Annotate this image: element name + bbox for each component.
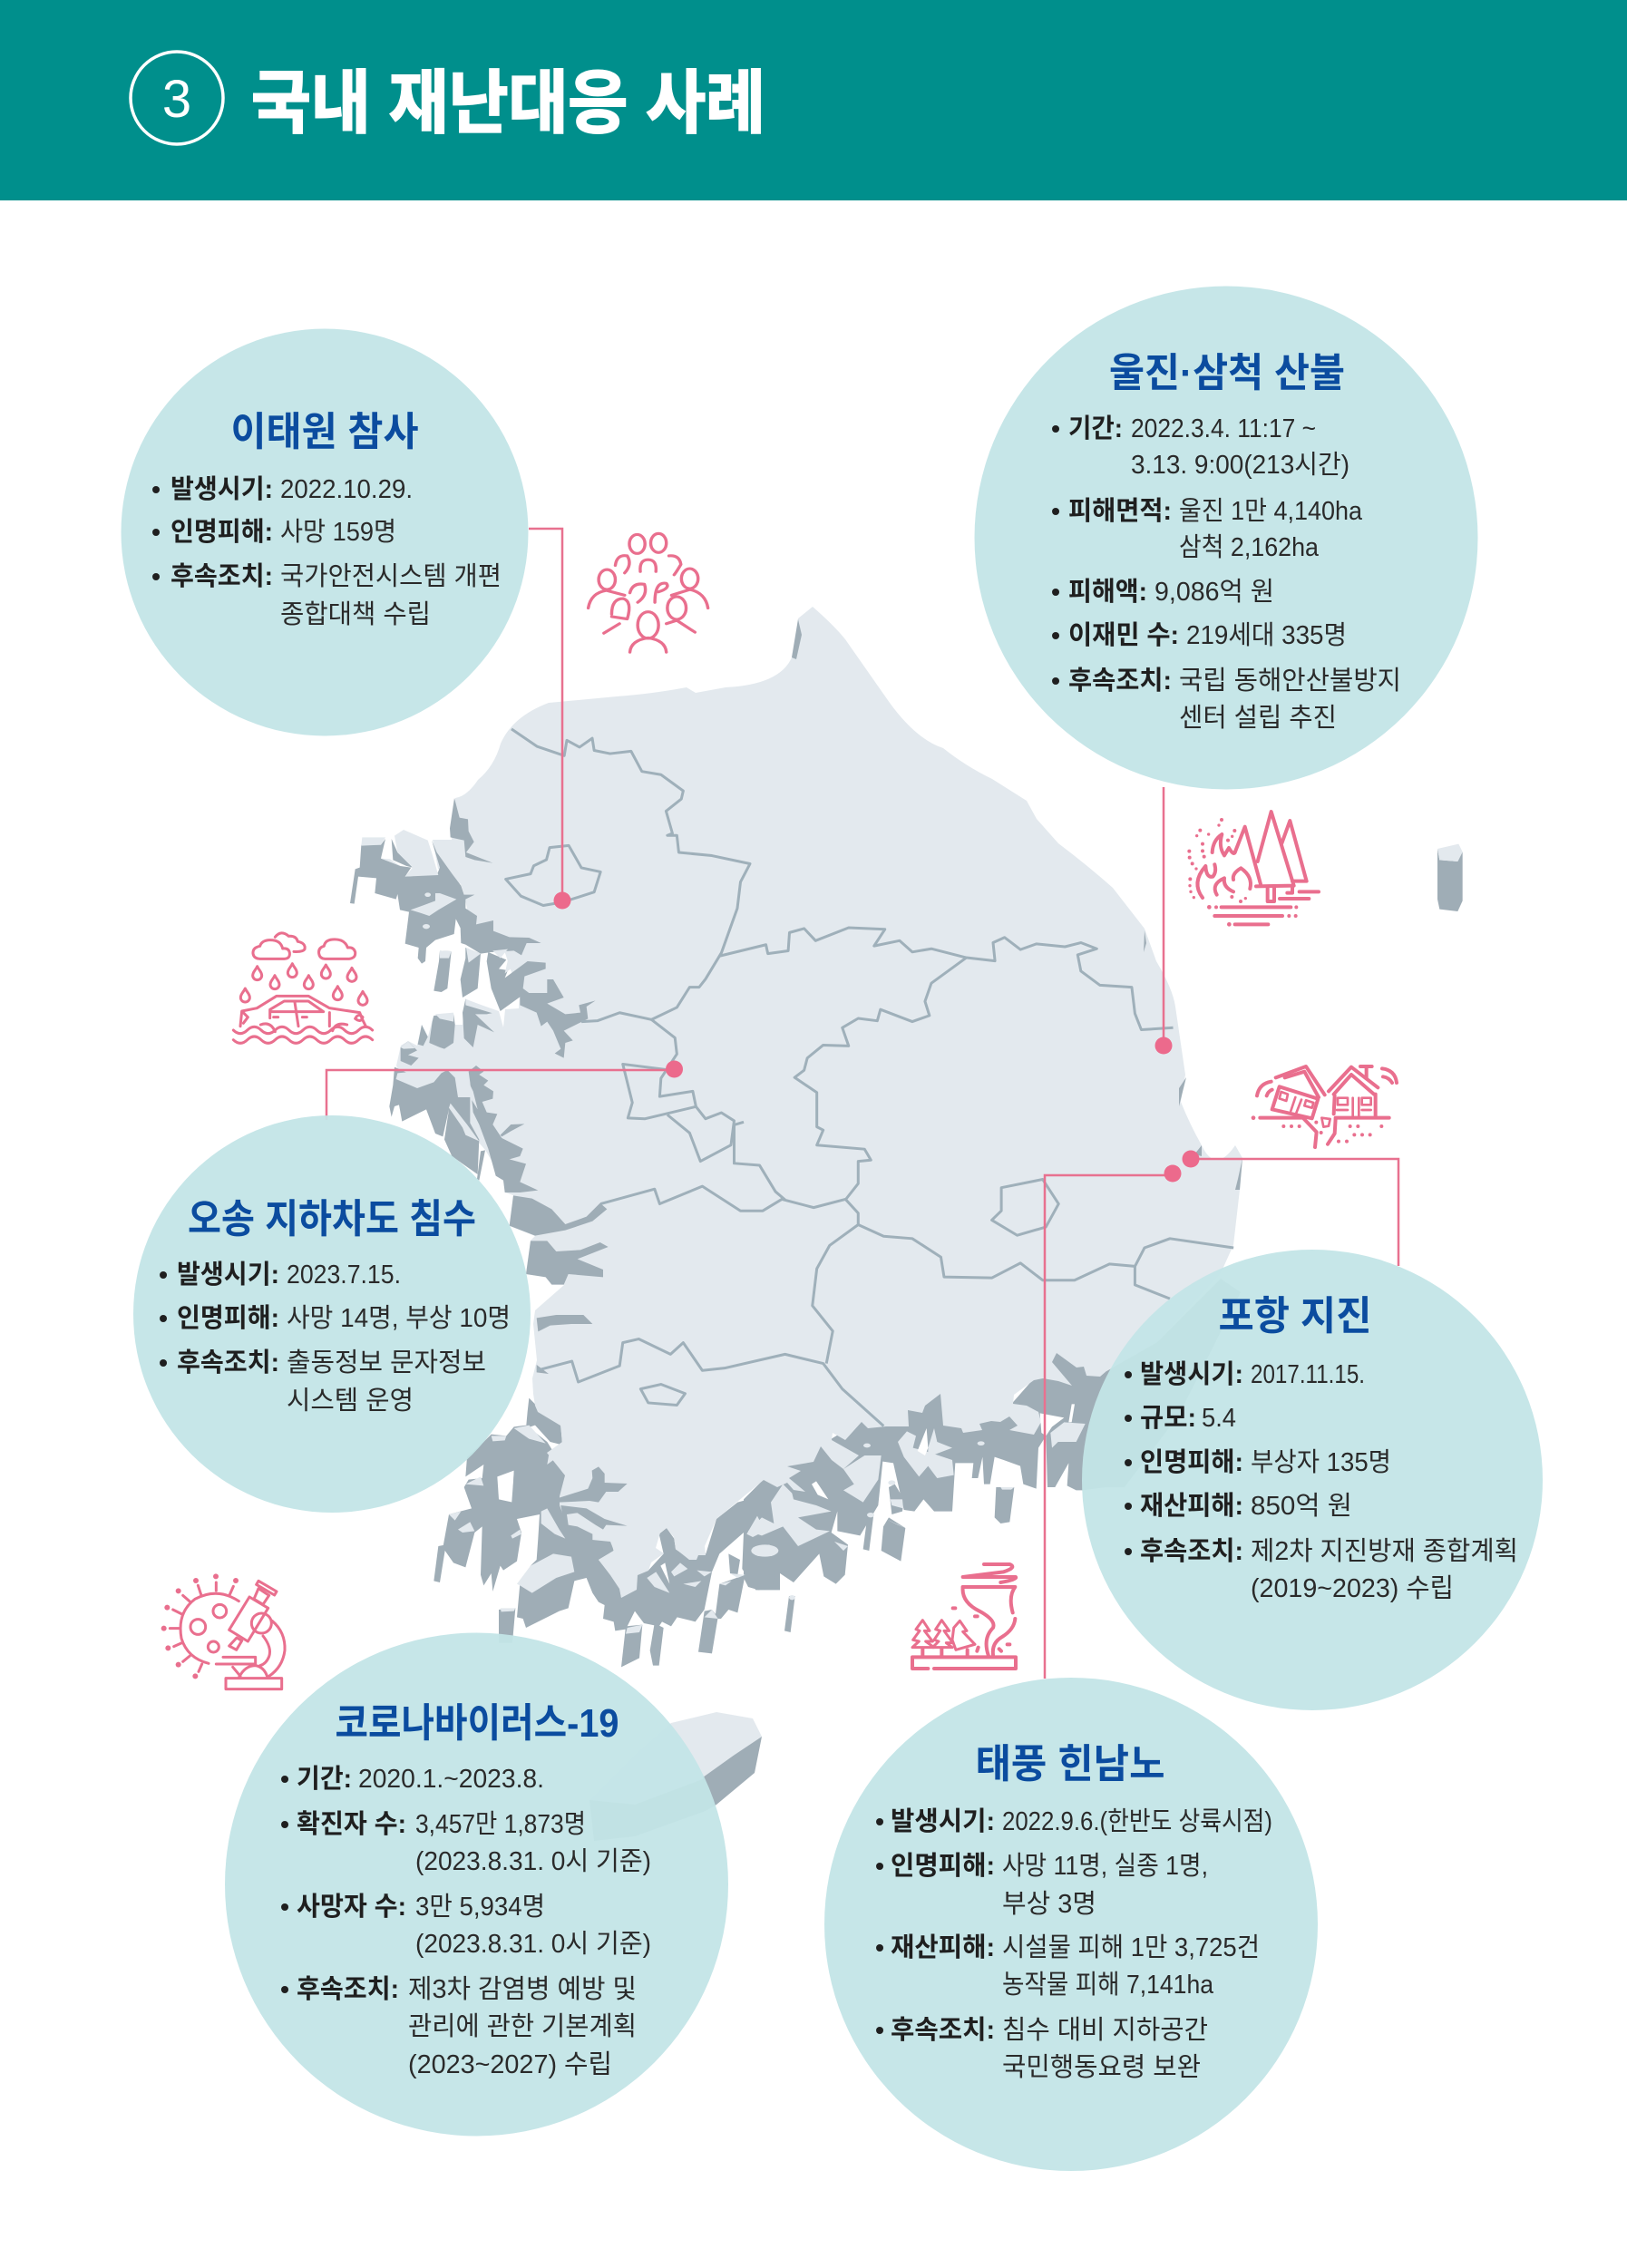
details: Osong: [159, 1260, 511, 1416]
details: Typhoon: 농작물 피해 7,141ha: [1002, 1971, 1214, 2000]
details: Pohang: 재산피해:: [1140, 1491, 1243, 1521]
details: Pohang: 2017.11.15.: [1251, 1360, 1365, 1389]
land mass: [396, 607, 1242, 1598]
details: Typhoon: 침수 대비 지하공간: [1002, 2015, 1208, 2045]
details: wildfire: 9,086억 원: [1154, 578, 1274, 607]
icon: forest fire: [1187, 812, 1319, 927]
details: Osong: •: [159, 1261, 168, 1289]
location pins: [553, 892, 1199, 1183]
details: Itaewon: [151, 474, 502, 629]
icon: earthquake damaged houses: [1252, 1066, 1397, 1147]
south coast shadow, western section: [434, 1398, 780, 1667]
panel: Typhoon Hinnamnor: [824, 1678, 1318, 2171]
heading: Osong: 오송 지하차도 침수: [188, 1197, 476, 1241]
icon: typhoon tornado with trees: [912, 1564, 1016, 1669]
details: wildfire: 3.13. 9:00(213시간): [1131, 451, 1349, 480]
mid-west coast shadows: [389, 1066, 609, 1331]
Ulleungdo island: [1437, 844, 1463, 911]
details: Pohang: •: [1124, 1448, 1133, 1476]
details: Typhoon: 재산피해:: [891, 1932, 995, 1962]
details: wildfire: •: [1051, 667, 1060, 695]
icon: virus and microscope: [161, 1573, 285, 1689]
details: Pohang: (2019~2023) 수립: [1251, 1573, 1454, 1603]
details: Typhoon: 부상 3명: [1002, 1890, 1096, 1919]
connector lines: [326, 529, 1398, 1679]
details: Itaewon: 국가안전시스템 개편: [280, 561, 502, 591]
details: Osong: 사망 14명, 부상 10명: [287, 1304, 511, 1333]
details: wildfire: •: [1051, 621, 1060, 649]
header band: [0, 0, 1627, 200]
heading: COVID-19: 코로나바이러스-19: [336, 1701, 619, 1746]
heading: Pohang: 포항 지진: [1219, 1294, 1371, 1338]
details: Osong: 2023.7.15.: [287, 1261, 401, 1290]
details: Typhoon: •: [875, 1807, 884, 1835]
map of South Korea: [350, 607, 1463, 1841]
details: Typhoon: 사망 11명, 실종 1명,: [1002, 1852, 1208, 1881]
details: wildfire: 2022.3.4. 11:17 ~: [1131, 414, 1316, 443]
icon: flooded car in rain: [233, 933, 373, 1043]
details: Typhoon: •: [875, 1852, 884, 1880]
details: Typhoon: 국민행동요령 보완: [1002, 2052, 1201, 2082]
details: Osong: •: [159, 1348, 168, 1377]
details: COVID-19: •: [280, 1765, 289, 1793]
details: Pohang: •: [1124, 1404, 1133, 1432]
details: Pohang: 850억 원: [1251, 1492, 1352, 1521]
details: Pohang: 5.4: [1202, 1404, 1236, 1433]
details: wildfire: 후속조치:: [1068, 666, 1172, 696]
details: Pohang: 발생시기:: [1140, 1359, 1243, 1389]
details: wildfire: [1051, 414, 1401, 733]
details: Typhoon: •: [875, 1933, 884, 1961]
details: Pohang: •: [1124, 1537, 1133, 1565]
details: wildfire: 이재민 수:: [1068, 620, 1179, 650]
south-west pole island: [511, 1469, 520, 1505]
details: COVID-19: 제3차 감염병 예방 및: [408, 1975, 637, 2004]
details: Typhoon: 발생시기:: [891, 1806, 995, 1836]
details: COVID-19: (2023~2027) 수립: [408, 2049, 612, 2079]
north-west coast and island shadows: [350, 798, 596, 1066]
details: Osong: 시스템 운영: [287, 1387, 414, 1416]
details: Osong: 후속조치:: [177, 1348, 279, 1377]
details: Typhoon: 2022.9.6.(한반도 상륙시점): [1002, 1807, 1272, 1836]
details: COVID-19: •: [280, 1893, 289, 1921]
details: COVID-19: [280, 1764, 651, 2079]
panel: Itaewon disaster: [122, 328, 528, 736]
details: Itaewon: 2022.10.29.: [280, 475, 413, 504]
details: Pohang: [1124, 1359, 1518, 1603]
details: wildfire: •: [1051, 414, 1060, 443]
south-west inlets: [537, 1365, 628, 1540]
details: Pohang: 제2차 지진방재 종합계획: [1251, 1536, 1518, 1566]
details: Pohang: 부상자 135명: [1251, 1448, 1391, 1477]
heading: wildfire: 울진·삼척 산불: [1109, 351, 1345, 395]
title: 국내 재난대응 사례: [251, 65, 765, 142]
details: COVID-19: 2020.1.~2023.8.: [358, 1765, 544, 1794]
details: Osong: 발생시기:: [177, 1260, 279, 1290]
details: wildfire: 기간:: [1068, 414, 1123, 443]
section number badge: 3: [162, 70, 191, 129]
details: Itaewon: •: [151, 562, 161, 590]
details: Typhoon: •: [875, 2016, 884, 2044]
section number badge: [131, 52, 223, 144]
details: Itaewon: •: [151, 475, 161, 503]
details: COVID-19: •: [280, 1810, 289, 1838]
panel: Pohang earthquake: [1082, 1250, 1543, 1710]
icon: crowd of people: [589, 533, 708, 652]
sea gaps south-west: [497, 1471, 669, 1584]
details: wildfire: 센터 설립 추진: [1179, 703, 1337, 733]
details: COVID-19: (2023.8.31. 0시 기준): [415, 1930, 651, 1959]
light island tops south-east: [748, 1422, 1086, 1600]
details: COVID-19: 후속조치:: [297, 1974, 399, 2004]
light island tops south-west: [449, 1426, 771, 1634]
light island tops north-west: [361, 830, 524, 1049]
details: Pohang: •: [1124, 1492, 1133, 1520]
details: Typhoon: 시설물 피해 1만 3,725건: [1002, 1933, 1260, 1962]
south-east coast shadow beneath Pohang panel: [1102, 1279, 1241, 1487]
sea gaps south-east: [812, 1404, 1075, 1499]
details: wildfire: 219세대 335명: [1186, 620, 1347, 650]
Jeju island: [589, 1712, 762, 1841]
details: Itaewon: •: [151, 518, 161, 546]
details: COVID-19: 관리에 관한 기본계획: [408, 2011, 637, 2041]
details: Osong: 인명피해:: [177, 1303, 279, 1333]
details: Typhoon: [875, 1806, 1272, 2082]
details: Pohang: 규모:: [1140, 1404, 1196, 1433]
details: Typhoon: 인명피해:: [891, 1851, 995, 1881]
details: wildfire: 삼척 2,162ha: [1179, 532, 1320, 562]
details: COVID-19: 3,457만 1,873명: [415, 1810, 586, 1839]
details: COVID-19: (2023.8.31. 0시 기준): [415, 1847, 651, 1876]
panel: COVID-19: [225, 1632, 728, 2137]
details: Itaewon: 종합대책 수립: [280, 599, 431, 629]
details: Pohang: 후속조치:: [1140, 1536, 1243, 1566]
details: Osong: 출동정보 문자정보: [287, 1348, 486, 1377]
details: Itaewon: 사망 159명: [280, 518, 396, 547]
details: Itaewon: 후속조치:: [170, 561, 273, 591]
provincial borders south: [537, 1180, 1233, 1426]
details: COVID-19: 사망자 수:: [297, 1892, 406, 1922]
details: COVID-19: 기간:: [297, 1764, 352, 1794]
light island tops mid-west: [396, 1072, 479, 1141]
details: wildfire: •: [1051, 497, 1060, 525]
details: COVID-19: 확진자 수:: [297, 1809, 406, 1839]
details: COVID-19: 3만 5,934명: [415, 1893, 545, 1922]
details: wildfire: 울진 1만 4,140ha: [1179, 497, 1363, 526]
details: Pohang: 인명피해:: [1140, 1447, 1243, 1477]
heading: Itaewon: 이태원 참사: [230, 410, 419, 454]
details: wildfire: 피해액:: [1068, 577, 1147, 607]
details: Pohang: •: [1124, 1360, 1133, 1388]
details: Typhoon: 후속조치:: [891, 2015, 995, 2045]
south coast shadow, eastern section: [744, 1353, 1106, 1632]
panel: Uljin Samcheok wildfire: [974, 287, 1478, 789]
details: wildfire: •: [1051, 578, 1060, 606]
details: wildfire: 국립 동해안산불방지: [1179, 666, 1401, 696]
details: COVID-19: •: [280, 1975, 289, 2003]
heading: Typhoon: 태풍 힌남노: [976, 1742, 1164, 1786]
details: Osong: •: [159, 1304, 168, 1332]
east coast slivers: [792, 619, 1242, 1190]
details: Itaewon: 발생시기:: [170, 474, 273, 504]
provincial borders north: [506, 729, 1174, 1200]
details: wildfire: 피해면적:: [1068, 496, 1172, 526]
details: Itaewon: 인명피해:: [170, 517, 273, 547]
panel: Osong underpass flood: [133, 1115, 531, 1513]
